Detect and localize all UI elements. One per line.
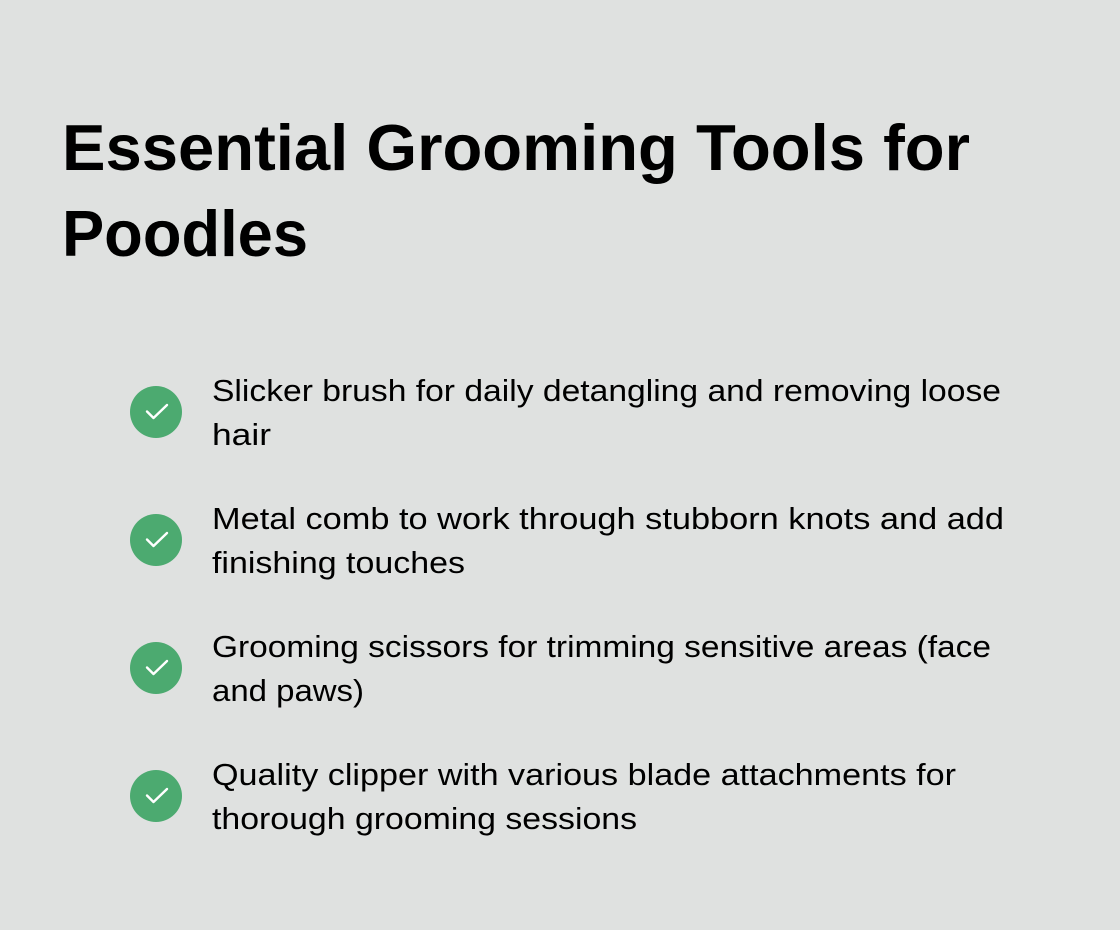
icon: green check circle xyxy=(130,514,182,566)
item 3: grooming scissors xyxy=(130,629,991,708)
item 2: metal comb xyxy=(130,501,1004,580)
text: quality clipper: thorough grooming sessions xyxy=(212,801,637,836)
title: Essential Grooming Tools for xyxy=(62,111,970,184)
text: metal comb: Metal comb to work through stubborn knots and add xyxy=(212,501,1004,536)
icon: green check circle xyxy=(130,642,182,694)
text: slicker brush: hair xyxy=(212,417,271,452)
text: grooming scissors: Grooming scissors for trimming sensitive areas (face xyxy=(212,629,991,664)
text: slicker brush xyxy=(212,373,1001,452)
icon: green check circle xyxy=(130,386,182,438)
text: metal comb: finishing touches xyxy=(212,545,465,580)
text: grooming scissors xyxy=(212,629,991,708)
title xyxy=(62,111,970,270)
item 4: quality clipper xyxy=(130,757,956,836)
title: Poodles xyxy=(62,197,308,270)
icon: green check circle xyxy=(130,770,182,822)
text: slicker brush: Slicker brush for daily detangling and removing loose xyxy=(212,373,1001,408)
text: quality clipper xyxy=(212,757,956,836)
text: quality clipper: Quality clipper with various blade attachments for xyxy=(212,757,956,792)
text: metal comb xyxy=(212,501,1004,580)
checklist xyxy=(130,373,1004,836)
item 1: slicker brush xyxy=(130,373,1001,452)
text: grooming scissors: and paws) xyxy=(212,673,364,708)
